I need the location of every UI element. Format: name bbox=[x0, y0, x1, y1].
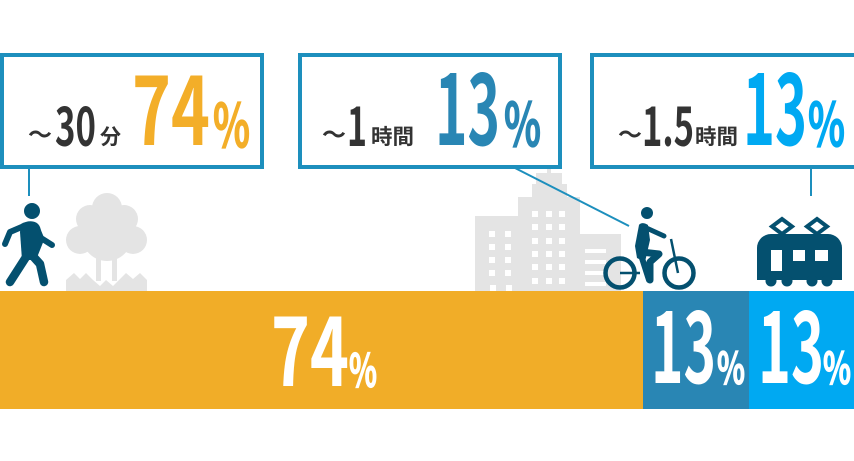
callout: up to 1 hour: 1 bbox=[347, 86, 367, 162]
bar segment: 74%: 74 bbox=[271, 278, 349, 414]
connector: train bbox=[810, 168, 812, 196]
callout: up to 30 minutes: 分 bbox=[100, 121, 121, 151]
callout: up to 1 hour: % bbox=[504, 77, 541, 164]
callout: up to 30 minutes: 〜 bbox=[28, 115, 52, 150]
stacked bar chart bbox=[0, 270, 854, 414]
connector: bicycle bbox=[515, 168, 629, 226]
callout: up to 1.5 hours: 〜 bbox=[618, 115, 642, 150]
icon: pedestrian bbox=[5, 203, 52, 282]
callout: up to 1.5 hours: 時間 bbox=[695, 121, 738, 151]
bar segment: 13% blue: % bbox=[717, 333, 745, 397]
bar segment: 74% bbox=[0, 278, 643, 414]
callout: up to 1.5 hours: 1.5 bbox=[642, 86, 694, 162]
connector: walking bbox=[28, 168, 30, 196]
callout: up to 30 minutes bbox=[2, 37, 262, 173]
bar segment: 74%: % bbox=[349, 335, 377, 401]
callout: up to 30 minutes: % bbox=[213, 78, 250, 165]
icon: tree bbox=[66, 193, 147, 291]
callout: up to 30 minutes: 74 bbox=[132, 37, 210, 173]
icon: city buildings bbox=[475, 168, 621, 291]
callout: up to 30 minutes: 30 bbox=[55, 86, 96, 162]
icon: train bbox=[757, 219, 842, 286]
icon: cyclist bbox=[606, 207, 694, 288]
callout: up to 1.5 hours bbox=[592, 32, 854, 173]
callout: up to 1 hour: 〜 bbox=[322, 115, 346, 150]
callout: up to 1 hour: 時間 bbox=[371, 121, 414, 151]
callout: up to 1 hour: 13 bbox=[435, 32, 500, 173]
callout: up to 1 hour bbox=[300, 32, 560, 173]
bar segment: 13% blue: 13 bbox=[651, 270, 716, 411]
